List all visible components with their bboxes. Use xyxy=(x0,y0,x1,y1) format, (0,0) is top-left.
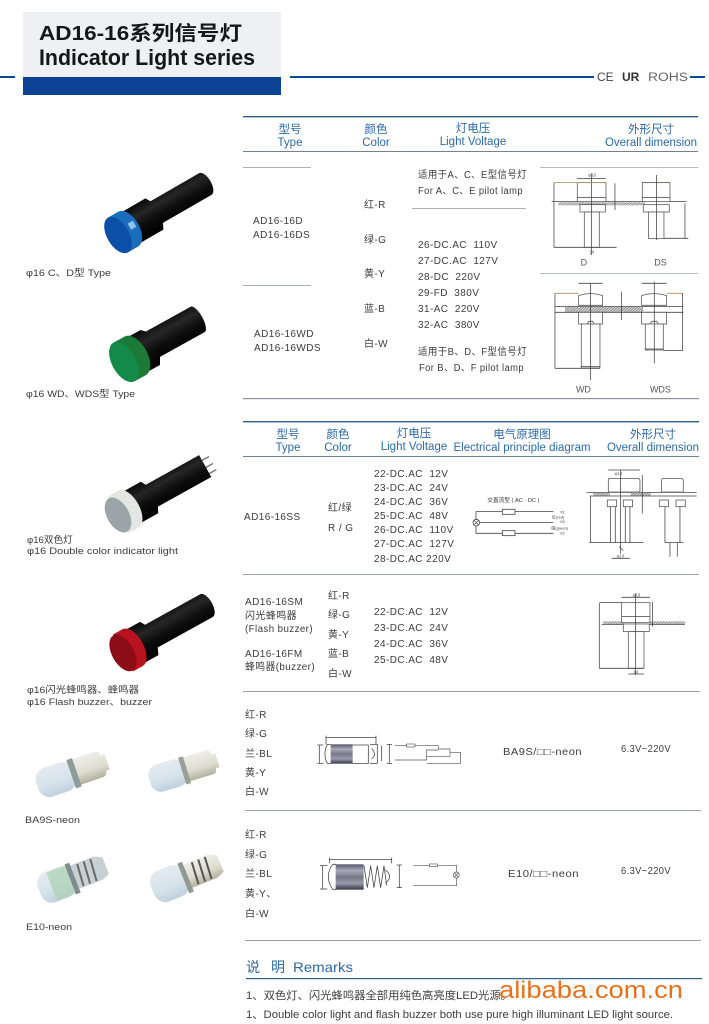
remarks heading: Remarks xyxy=(293,959,353,975)
row: AD16-16SM and FM: (Flash buzzer) xyxy=(245,624,313,635)
dimension drawing: AD16-16SS: φ14 xyxy=(617,554,625,559)
row: E10 neon: 黄-Y、 xyxy=(245,887,277,900)
header banner xyxy=(23,12,281,95)
row: AD16-16SM and FM: 黄-Y xyxy=(328,628,349,641)
row: AD16-16SS: AD16-16SS xyxy=(244,512,301,523)
certification marks: CE xyxy=(597,70,614,84)
row: BA9S neon: 绿-G xyxy=(245,727,267,740)
bulb photo: E10 right xyxy=(146,848,226,906)
table 1 voltages: 适用于A、C、E型信号灯 xyxy=(418,168,527,181)
title: Chinese: AD16-16系列信号灯 xyxy=(39,22,242,45)
bulb photo: BA9S left xyxy=(32,748,112,800)
row: BA9S neon: BA9S/□□-neon xyxy=(503,747,582,758)
certification marks: UR xyxy=(622,70,640,84)
row: BA9S neon xyxy=(245,708,671,798)
row: E10 neon: 白-W xyxy=(245,907,269,920)
table 1 colours: 蓝-B xyxy=(364,303,385,315)
row: BA9S neon: 6.3V~220V xyxy=(621,744,671,755)
row: BA9S neon: 黄-Y xyxy=(245,766,266,779)
dimension drawing: buzzer: φ19 xyxy=(633,593,641,598)
caption: double colour indicator: φ16双色灯 xyxy=(27,534,73,546)
table 1 voltages: 31-AC 220V xyxy=(418,304,480,315)
row: AD16-16SM and FM: 24-DC.AC 36V xyxy=(374,639,448,650)
row: AD16-16SS: 24-DC.AC 36V xyxy=(374,497,448,508)
table 2 header: Color xyxy=(324,442,352,454)
table 1 types: AD16-16D xyxy=(253,216,303,227)
remarks text: 1、双色灯、闪光蜂鸣器全部用纯色高亮度LED光源。 xyxy=(246,988,512,1002)
table 1 colours xyxy=(364,198,388,350)
dimension drawing: AD16-16SS xyxy=(587,470,697,559)
remarks heading: 说 xyxy=(246,959,260,975)
caption: flash buzzer xyxy=(27,684,153,708)
table 1 colours: 红-R xyxy=(364,198,386,211)
table 2 header: Electrical principle diagram xyxy=(454,442,590,454)
row: AD16-16SS xyxy=(244,469,454,565)
lamp photo: white double colour xyxy=(98,444,223,539)
table 2 header: Type xyxy=(276,442,300,454)
diagram: BA9S bulb and circuit xyxy=(317,736,461,764)
caption: BA9S-neon: BA9S-neon xyxy=(25,815,80,826)
row: AD16-16SM and FM: 蜂鸣器(buzzer) xyxy=(245,660,315,673)
table 2 header xyxy=(243,421,699,457)
caption: flash buzzer: φ16闪光蜂鸣器、蜂鸣器 xyxy=(27,684,139,696)
row: AD16-16SS: 25-DC.AC 48V xyxy=(374,511,448,522)
table 2 header: 颜色 xyxy=(326,427,350,441)
row: E10 neon: 红-R xyxy=(245,828,267,841)
row: AD16-16SM and FM: 绿-G xyxy=(328,608,350,621)
row: AD16-16SM and FM xyxy=(245,589,448,680)
row: AD16-16SM and FM: 22-DC.AC 12V xyxy=(374,607,448,618)
dimension drawing: WD and WDS: WDS xyxy=(650,385,671,395)
caption: flash buzzer: φ16 Flash buzzer、buzzer xyxy=(27,697,153,708)
table 2 header: 灯电压 xyxy=(397,427,431,440)
table 1 header xyxy=(243,116,698,152)
table 2 header: Light Voltage xyxy=(381,441,447,453)
row: AD16-16SS: R / G xyxy=(328,523,353,534)
electrical principle diagram: X2 xyxy=(560,531,566,536)
row: AD16-16SM and FM: 白-W xyxy=(328,667,352,680)
remarks text: 1、Double color light and flash buzzer both use pure high illuminant LED light source. xyxy=(246,1009,673,1021)
row: BA9S neon: 红-R xyxy=(245,708,267,721)
table 1 header: Overall dimension xyxy=(605,137,697,149)
row: E10 neon xyxy=(245,828,671,920)
row: AD16-16SS: 红/绿 xyxy=(328,501,352,514)
title: English: Indicator Light series xyxy=(39,45,255,70)
row: E10 neon: 6.3V~220V xyxy=(621,866,671,877)
electrical principle diagram: X0 xyxy=(560,519,566,524)
row: BA9S neon: 白-W xyxy=(245,785,269,798)
row: E10 neon: E10/□□-neon xyxy=(508,869,579,880)
table 1 header: 外形尺寸 xyxy=(628,122,674,136)
row: BA9S neon: 兰-BL xyxy=(245,747,272,760)
lamp photo: green WD type xyxy=(103,299,214,387)
dimension drawing: D and DS: 14 xyxy=(589,249,595,254)
row: AD16-16SS: 27-DC.AC 127V xyxy=(374,539,454,550)
table 1 types xyxy=(243,167,321,354)
dimension drawing: D and DS: φ19 xyxy=(588,173,597,178)
table 1 voltages xyxy=(412,168,527,374)
table 1 voltages: 27-DC.AC 127V xyxy=(418,256,498,267)
table 1 header: Light Voltage xyxy=(440,136,506,148)
dimension drawing: AD16-16SS: φ19 xyxy=(615,471,623,476)
lamp photo: blue D type xyxy=(98,164,221,258)
table 2 header: 电气原理图 xyxy=(493,427,551,441)
diagram: E10 bulb and circuit xyxy=(320,858,459,890)
row: AD16-16SS: 22-DC.AC 12V xyxy=(374,469,448,480)
electrical principle diagram: 红(red) xyxy=(552,514,565,520)
row: AD16-16SS: 26-DC.AC 110V xyxy=(374,525,454,536)
row: E10 neon: 绿-G xyxy=(245,848,267,861)
row: AD16-16SM and FM: 闪光蜂鸣器 xyxy=(245,609,297,622)
table 1 header: Color xyxy=(362,137,390,149)
remarks heading: 明 xyxy=(271,959,285,975)
certification marks xyxy=(597,70,705,84)
dimension drawing: WD and WDS xyxy=(555,282,683,395)
table 1 types: AD16-16WDS xyxy=(254,343,321,354)
lamp photo: red buzzer xyxy=(103,585,222,677)
row: AD16-16SS: 23-DC.AC 24V xyxy=(374,483,448,494)
table 1 voltages: 29-FD 380V xyxy=(418,288,479,299)
table 1 header: Type xyxy=(278,137,302,149)
electrical principle diagram xyxy=(473,496,569,536)
row: AD16-16SM and FM: AD16-16SM xyxy=(245,597,303,608)
dimension drawing: WD and WDS: WD xyxy=(576,385,591,395)
electrical principle diagram: X1 xyxy=(560,509,566,514)
remarks text xyxy=(246,988,673,1021)
table 1 header: 灯电压 xyxy=(456,122,490,135)
row: AD16-16SM and FM: 23-DC.AC 24V xyxy=(374,623,448,634)
table 2 header: 外形尺寸 xyxy=(630,427,676,441)
caption: C D type: φ16 C、D型 Type xyxy=(26,267,111,279)
dimension drawing: D and DS: DS xyxy=(654,258,667,268)
table 1 voltages: For B、D、F pilot lamp xyxy=(419,363,524,374)
caption: WD WDS type: φ16 WD、WDS型 Type xyxy=(26,388,135,400)
table 1 voltages: 26-DC.AC 110V xyxy=(418,240,498,251)
row: AD16-16SM and FM: 蓝-B xyxy=(328,648,349,660)
dimension drawing: buzzer xyxy=(599,593,685,675)
caption: double colour indicator xyxy=(27,534,178,557)
certification marks: ROHS xyxy=(648,72,688,84)
row: AD16-16SM and FM: AD16-16FM xyxy=(245,649,303,660)
table 1 colours: 绿-G xyxy=(364,233,386,246)
table 1 types: AD16-16WD xyxy=(254,329,314,340)
row: AD16-16SS: 28-DC.AC 220V xyxy=(374,554,451,565)
table 1 voltages: For A、C、E pilot lamp xyxy=(418,186,523,197)
table 1 colours: 白-W xyxy=(364,337,388,350)
table 1 colours: 黄-Y xyxy=(364,267,385,280)
table 1 voltages: 28-DC 220V xyxy=(418,272,480,283)
caption: E10-neon: E10-neon xyxy=(26,922,72,933)
dimension drawing: D and DS: D xyxy=(581,258,588,268)
caption: double colour indicator: φ16 Double color indicator light xyxy=(27,546,178,557)
table 1 voltages: 32-AC 380V xyxy=(418,320,480,331)
table 1 types: AD16-16DS xyxy=(253,230,310,241)
table 2 header: 型号 xyxy=(276,427,300,441)
row: E10 neon: 兰-BL xyxy=(245,867,272,880)
electrical principle diagram: 交直流型 ( AC · DC ) xyxy=(487,496,540,504)
bulb photo: BA9S right xyxy=(146,747,222,794)
table 2 header: Overall dimension xyxy=(607,442,699,454)
electrical principle diagram: 绿(green) xyxy=(551,524,569,530)
table 1 header: 型号 xyxy=(278,122,302,136)
remarks heading xyxy=(246,959,702,979)
watermark: alibaba.com.cn xyxy=(499,977,683,1004)
row: AD16-16SM and FM: 红-R xyxy=(328,589,350,602)
row: AD16-16SM and FM: 25-DC.AC 48V xyxy=(374,655,448,666)
dimension drawing: buzzer: 14 xyxy=(633,669,639,674)
dimension drawing: D and DS xyxy=(540,167,698,273)
table 1 voltages: 适用于B、D、F型信号灯 xyxy=(418,345,527,358)
table 1 header: 颜色 xyxy=(364,122,388,136)
bulb photo: E10 left xyxy=(34,851,111,906)
